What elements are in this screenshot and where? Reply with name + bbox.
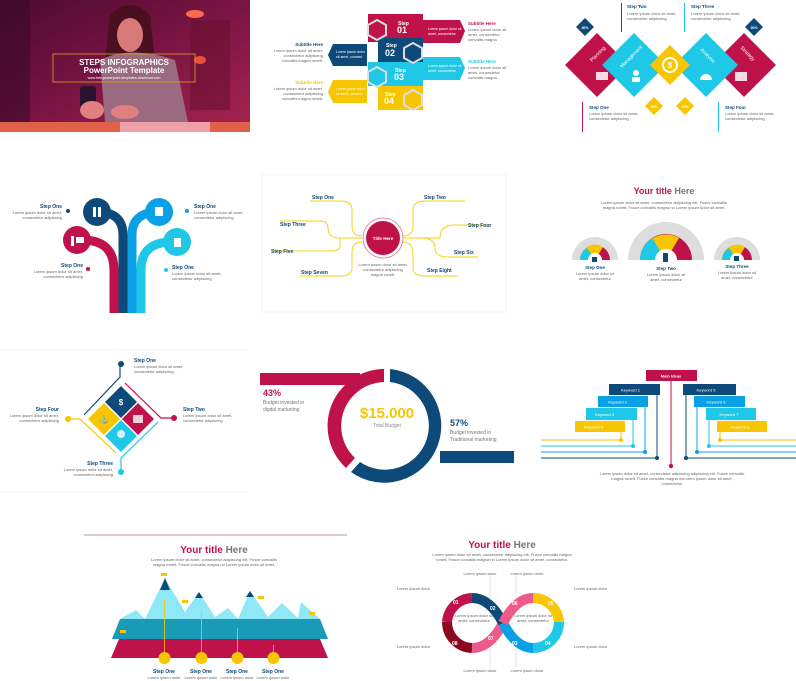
panel: title photo bbox=[0, 0, 250, 132]
panel: diamond process: Step Four bbox=[725, 105, 746, 110]
panel: diamond process: Management bbox=[619, 44, 644, 69]
panel: donut budget: digital marketing bbox=[263, 407, 300, 413]
panel: mind map bbox=[262, 175, 506, 312]
panel: tree: Lorem ipsum dolor sit amet, bbox=[13, 210, 62, 215]
panel: hexagon steps: consectetur adipiscing bbox=[283, 53, 323, 58]
panel: hexagon steps: amet, consectetur bbox=[428, 69, 457, 73]
panel: infinity: amet, consectetur bbox=[517, 618, 550, 623]
panel: mountains: Lorem ipsum dolor bbox=[147, 675, 181, 680]
panel: hexagon steps: Lorem ipsum dolor sit bbox=[428, 27, 461, 31]
panel: hexagon steps: Subtitle Here bbox=[295, 42, 323, 47]
panel: infinity: Lorem ipsum dolor bbox=[510, 668, 544, 673]
panel: square diamond: consectetur adipiscing bbox=[183, 418, 223, 423]
panel: hexagon steps: amet, consectetur bbox=[428, 32, 457, 36]
panel: infinity: ronett. Fusce convallis magna no Lorem ipsum dolor sit amet, consectetur. bbox=[436, 557, 568, 562]
panel: mountains: Step One bbox=[226, 669, 248, 675]
panel: tree: Step One bbox=[172, 265, 194, 271]
panel: donut budget: $15.000 bbox=[360, 405, 414, 422]
panel: mind map: Title Here bbox=[373, 236, 394, 241]
panel: square diamond: consectetur adipiscing bbox=[134, 369, 174, 374]
panel: hexagon steps: convallis magna bbox=[468, 37, 497, 42]
panel: mountains: Step One bbox=[190, 669, 212, 675]
panel: diamond process: Lorem ipsum dolor sit amet, bbox=[691, 11, 740, 16]
panel: hexagon steps: convallis magna bbox=[468, 75, 497, 80]
panel: gauges: Lorem ipsum dolor sit amet, consectetur adipiscing elit. Fusce convallis bbox=[601, 200, 727, 205]
panel: infinity: Lorem ipsum dolor bbox=[574, 586, 608, 591]
panel: mountains: magna ronett. Fusce convallis magna no Lorem ipsum dolor sit amet, bbox=[153, 562, 275, 567]
panel: hexagon steps: amet, consectetur bbox=[468, 32, 500, 37]
panel: donut budget: Total Budget bbox=[373, 423, 402, 429]
panel: mountains: Lorem ipsum dolor bbox=[256, 675, 290, 680]
panel: gauges: Lorem ipsum dolor sit bbox=[647, 272, 686, 277]
panel: donut budget: 57% bbox=[450, 418, 468, 428]
panel: keywords bbox=[541, 370, 796, 486]
panel: mind map: magna ronett. bbox=[371, 272, 395, 277]
panel: tree: Lorem ipsum dolor sit amet, bbox=[172, 271, 221, 276]
panel: keywords: Main Ideas bbox=[661, 374, 682, 378]
panel: mind map: Step One bbox=[312, 195, 334, 201]
panel: hexagon steps: Lorem ipsum dolor sit amet, bbox=[274, 48, 323, 53]
panel: diamond process: Step Three bbox=[691, 4, 715, 9]
panel: diamond process: 20% bbox=[650, 105, 658, 109]
panel: mountains: Your title Here bbox=[180, 545, 248, 556]
panel: hexagon steps: sit amet, consect bbox=[336, 55, 362, 59]
panel: diamond process: Strategy bbox=[739, 45, 756, 63]
panel: infinity bbox=[397, 540, 608, 673]
panel: keywords: Keyword 8 bbox=[731, 424, 750, 430]
panel: keywords: Keyword 4 bbox=[584, 424, 604, 430]
panel: infinity: Lorem ipsum dolor bbox=[510, 571, 544, 576]
panel: mountains: Lorem ipsum dolor bbox=[184, 675, 218, 680]
panel: mind map: Step Four bbox=[468, 223, 491, 229]
panel: infinity: Lorem ipsum dolor bbox=[397, 586, 431, 591]
panel: tree: Lorem ipsum dolor sit amet, bbox=[194, 210, 243, 215]
panel: gauges: Lorem ipsum dolor sit bbox=[718, 270, 757, 275]
panel: mind map: Step Three bbox=[280, 222, 306, 228]
panel: square diamond: $ bbox=[119, 398, 124, 407]
panel: hexagon steps: convallis magna ronett. bbox=[282, 58, 323, 63]
panel: infinity: 07 bbox=[488, 636, 494, 642]
panel: infinity: Lorem ipsum dolor sit bbox=[455, 613, 494, 618]
panel: infinity: Lorem ipsum dolor bbox=[397, 644, 431, 649]
panel: diamond process: consectetur adipiscing bbox=[589, 116, 629, 121]
panel: infinity: Lorem ipsum dolor sit bbox=[514, 613, 553, 618]
panel: diamond process: Analysis bbox=[699, 47, 716, 65]
panel: hexagon steps: Step bbox=[386, 43, 397, 49]
panel: diamond process: Planning bbox=[589, 45, 607, 63]
panel: mind map: Step Five bbox=[271, 249, 293, 255]
panel: gauges: amet, consectetur bbox=[721, 275, 754, 280]
panel: keywords: Keyword 7 bbox=[720, 412, 739, 417]
panel: infinity: 03 bbox=[512, 641, 518, 647]
panel: infinity: Lorem ipsum dolor bbox=[463, 668, 497, 673]
panel: hexagon steps: Step bbox=[385, 92, 396, 98]
panel: tree: Step One bbox=[40, 204, 62, 210]
panel: diamond process: Lorem ipsum dolor sit amet, bbox=[725, 111, 774, 116]
title box bbox=[53, 54, 195, 82]
panel: tree: consectetur adipiscing bbox=[194, 215, 234, 220]
panel: hexagon steps: convallis magna ronett. bbox=[282, 96, 323, 101]
panel: gauges: magna ronett. Fusce convallis magna no Lorem ipsum dolor sit amet, bbox=[603, 205, 725, 210]
panel: diamond process bbox=[565, 3, 776, 132]
panel: mind map: Lorem ipsum dolor sit amet, bbox=[358, 262, 408, 267]
panel: gauges: Step One bbox=[585, 265, 605, 270]
panel: square diamond: Step Four bbox=[36, 407, 59, 413]
panel: square diamond: Lorem ipsum dolor sit amet, bbox=[183, 413, 232, 418]
panel: mountains: Lorem ipsum dolor sit amet, consectetur adipiscing elit. Fusce convallis bbox=[151, 557, 277, 562]
panel: mind map: Step Eight bbox=[427, 268, 452, 274]
panel: infinity: 01 bbox=[453, 600, 459, 606]
panel: infinity: 02 bbox=[490, 606, 496, 612]
panel: infinity: Your title Here bbox=[468, 540, 536, 551]
panel: gauges: Step Three bbox=[725, 264, 749, 269]
panel: square diamond: Lorem ipsum dolor sit amet, bbox=[10, 413, 59, 418]
panel: donut budget: Traditional marketing bbox=[450, 437, 497, 443]
panel: diamond process: consectetur adipiscing bbox=[691, 16, 731, 21]
panel: hexagon steps: amet, consectetur bbox=[468, 70, 500, 75]
panel: infinity: Lorem ipsum dolor sit amet, consectetur adipiscing elit. Fusce convallis magna bbox=[432, 552, 572, 557]
panel: square diamond: Lorem ipsum dolor sit amet, bbox=[64, 467, 113, 472]
panel: infinity: Lorem ipsum dolor bbox=[463, 571, 497, 576]
panel: square diamond: consectetur adipiscing bbox=[19, 418, 59, 423]
panel: tree: consectetur adipiscing bbox=[43, 274, 83, 279]
panel: mind map: Step Six bbox=[454, 250, 474, 256]
panel: tree: consectetur adipiscing bbox=[22, 215, 62, 220]
panel: hexagon steps: Lorem ipsum dolor sit bbox=[428, 64, 461, 68]
panel: keywords: Lorem ipsum dolor sit amet, consectetur adipiscing adipiscing elit. Fusce convallis bbox=[600, 471, 744, 476]
panel: square diamond: Lorem ipsum dolor sit amet, bbox=[134, 364, 183, 369]
title box: www.free-powerpoint-templates-download.com bbox=[88, 76, 160, 80]
panel: hexagon steps: Subtitle Here bbox=[295, 80, 323, 85]
panel: donut budget bbox=[260, 369, 514, 483]
panel: diamond process: 20% bbox=[750, 26, 758, 30]
panel: gauges: amet, consectetur bbox=[650, 277, 683, 282]
panel: infinity: amet, consectetur bbox=[458, 618, 491, 623]
panel: hexagon steps: consectetur adipiscing bbox=[283, 91, 323, 96]
panel: mountains: Lorem ipsum dolor bbox=[220, 675, 254, 680]
title box: STEPS INFOGRAPHICS bbox=[79, 58, 170, 67]
panel: tree bbox=[13, 198, 243, 313]
panel: mountains: Step One bbox=[262, 669, 284, 675]
panel: hexagon steps: Step bbox=[395, 68, 406, 74]
panel: keywords: Keyword 2 bbox=[608, 400, 628, 404]
panel: gauges: Your title Here bbox=[634, 186, 694, 196]
panel: tree: Step One bbox=[61, 263, 83, 269]
panel: hexagon steps: Step bbox=[398, 21, 409, 27]
panel: square diamond: consectetur adipiscing bbox=[73, 472, 113, 477]
panel: infinity: 06 bbox=[512, 601, 518, 607]
panel: keywords: consectetur bbox=[662, 481, 683, 486]
panel: hexagon steps: 03 bbox=[394, 72, 404, 82]
panel: diamond process: consectetur adipiscing bbox=[725, 116, 765, 121]
panel: infinity: Lorem ipsum dolor bbox=[574, 644, 608, 649]
panel: donut budget: Budget invested in bbox=[263, 400, 304, 406]
panel: diamond process: Lorem ipsum dolor sit amet, bbox=[627, 11, 676, 16]
panel: diamond process: Step Two bbox=[627, 4, 647, 9]
panel: mind map: Step Two bbox=[424, 195, 446, 201]
panel: donut budget: Budget invested in bbox=[450, 430, 491, 436]
panel: hexagon steps: Lorem ipsum dolor bbox=[336, 50, 366, 54]
panel: hexagon steps: Lorem ipsum dolor sit bbox=[468, 27, 507, 32]
panel: hexagon steps: 01 bbox=[397, 25, 407, 35]
panel: mind map: consectetur adipiscing bbox=[363, 267, 403, 272]
panel: gauges: Lorem ipsum dolor sit bbox=[576, 271, 615, 276]
panel: square diamond: Step Two bbox=[183, 407, 205, 413]
panel: hexagon steps: Lorem ipsum dolor bbox=[336, 87, 366, 91]
panel: diamond process: 15% bbox=[681, 105, 689, 109]
panel: infinity: 04 bbox=[545, 641, 551, 647]
panel: keywords: Keyword 1 bbox=[621, 388, 641, 392]
panel: tree: consectetur adipiscing bbox=[172, 276, 212, 281]
panel: infinity: 05 bbox=[548, 601, 554, 607]
panel: tree: Step One bbox=[194, 204, 216, 210]
panel: diamond process: Step One bbox=[589, 105, 609, 110]
panel: keywords: Keyword 5 bbox=[697, 388, 716, 392]
panel: hexagon steps: Subtitle Here bbox=[468, 59, 496, 64]
panel: square diamond bbox=[0, 350, 248, 492]
panel: gauges: amet, consectetur bbox=[579, 276, 612, 281]
panel: square diamond: ⚓ bbox=[99, 414, 109, 424]
panel: gauges bbox=[572, 186, 760, 282]
panel: gauges: Step Two bbox=[656, 266, 676, 271]
panel: diamond process: Lorem ipsum dolor sit amet, bbox=[589, 111, 638, 116]
panel: keywords: Keyword 3 bbox=[595, 412, 615, 417]
panel: hexagon steps: Lorem ipsum dolor sit amet, bbox=[274, 86, 323, 91]
panel: diamond process: consectetur adipiscing bbox=[627, 16, 667, 21]
panel: square diamond: Step One bbox=[134, 358, 156, 364]
panel: hexagon steps: Subtitle Here bbox=[468, 21, 496, 26]
panel: tree: Lorem ipsum dolor sit amet, bbox=[34, 269, 83, 274]
panel: hexagon steps: 04 bbox=[384, 96, 394, 106]
panel: infinity: 08 bbox=[452, 641, 458, 647]
panel: keywords: Keyword 6 bbox=[707, 400, 726, 404]
panel: keywords: magna ronett. Fusce convallis magna noLorem ipsum dolor sit amet, bbox=[611, 476, 733, 481]
panel: mind map: Step Seven bbox=[301, 270, 328, 276]
panel: hexagon steps: sit amet, consect bbox=[336, 92, 362, 96]
panel: square diamond: Step Three bbox=[87, 461, 113, 467]
panel: mountains bbox=[84, 535, 347, 680]
panel: hexagon steps: Lorem ipsum dolor sit bbox=[468, 65, 507, 70]
panel: hexagon steps bbox=[274, 14, 507, 110]
panel: diamond process: 30% bbox=[581, 26, 589, 30]
panel: diamond process: $ bbox=[668, 61, 673, 70]
panel: hexagon steps: 02 bbox=[385, 48, 395, 58]
panel: mountains: Step One bbox=[153, 669, 175, 675]
panel: donut budget: 43% bbox=[263, 388, 281, 398]
title box: PowerPoint Template bbox=[84, 66, 165, 75]
